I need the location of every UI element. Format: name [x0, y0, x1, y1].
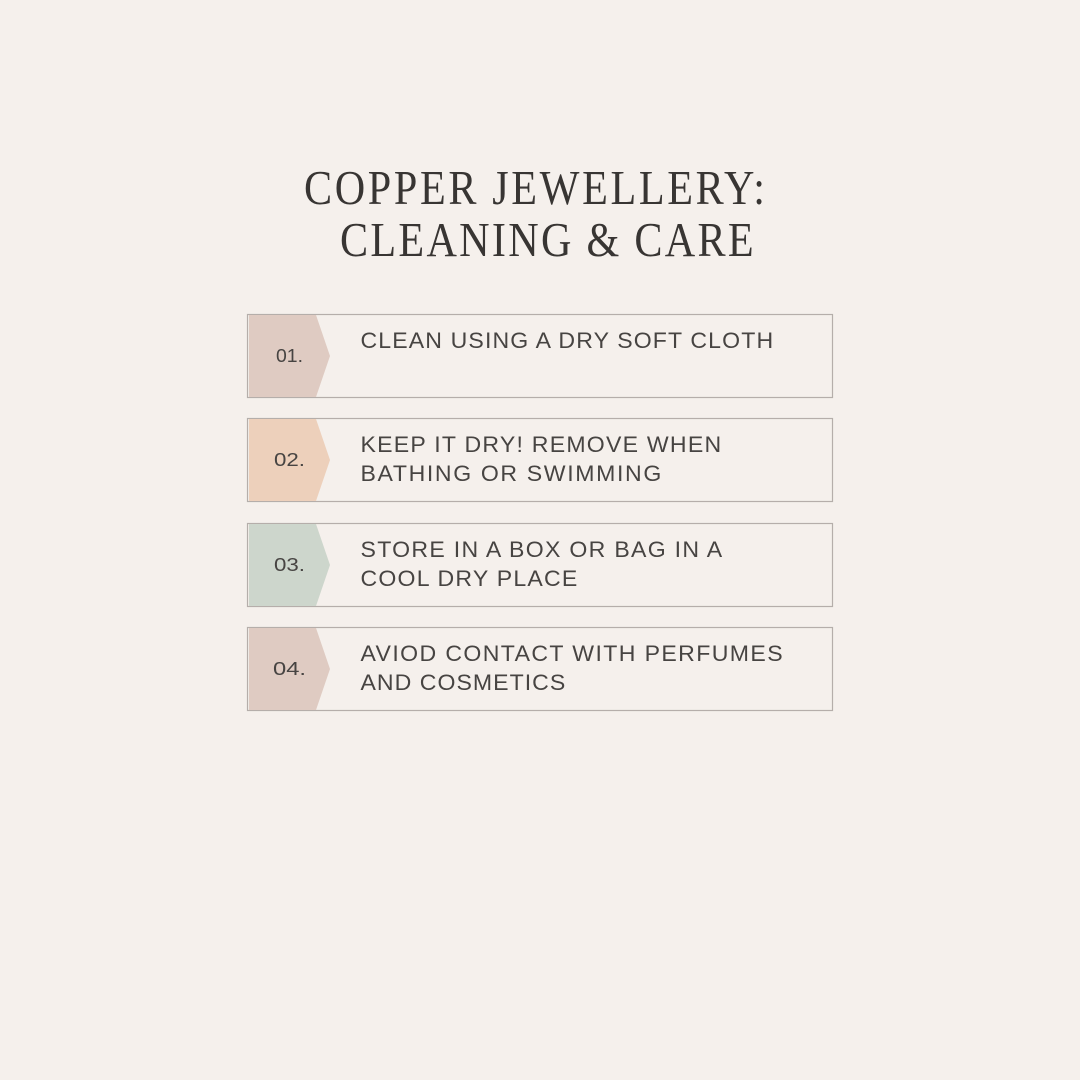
panel: step 3 [248, 524, 832, 606]
text: step 1: CLEAN USING A DRY SOFT CLOTH [360, 328, 773, 353]
number: 01: 01. [276, 345, 303, 366]
chevron: step 1 [249, 315, 330, 397]
title: COPPER JEWELLERY: [304, 160, 765, 215]
text: step 4: AND COSMETICS [360, 670, 565, 695]
text: step 4: AVIOD CONTACT WITH PERFUMES [360, 641, 783, 666]
panel: step 2 [248, 418, 832, 502]
title [304, 160, 765, 267]
number: 03: 03. [274, 554, 305, 575]
chevron: step 4 [249, 628, 330, 710]
panel: step 1 [248, 314, 832, 398]
panel: step 4 [248, 628, 832, 710]
text: step 2: BATHING OR SWIMMING [360, 461, 661, 486]
number: 02: 02. [274, 449, 305, 470]
text: step 4 [360, 641, 783, 695]
chevron: step 2 [249, 419, 330, 501]
text: step 2 [360, 432, 721, 486]
chevron: step 3 [249, 524, 330, 606]
title: CLEANING & CARE [340, 212, 754, 267]
text: step 2: KEEP IT DRY! REMOVE WHEN [360, 432, 721, 457]
text: step 3: COOL DRY PLACE [360, 566, 577, 591]
number: 04: 04. [273, 658, 306, 679]
text: step 3: STORE IN A BOX OR BAG IN A [360, 537, 722, 562]
text: step 3 [360, 537, 722, 591]
